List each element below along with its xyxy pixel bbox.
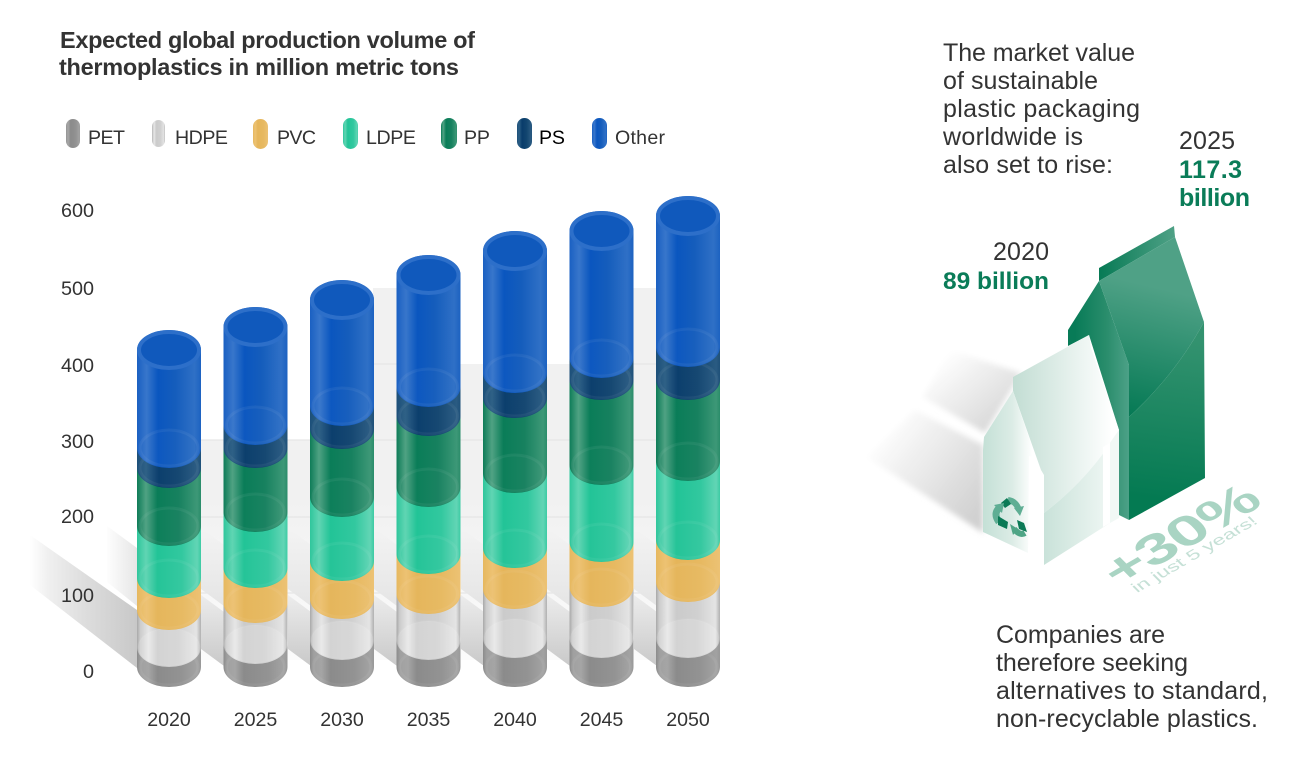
intro text: market value: worldwide is <box>942 123 1083 151</box>
HDPE segment <box>137 590 201 667</box>
HDPE segment <box>310 579 374 660</box>
carton shadows <box>867 350 1021 533</box>
value label: 2025: 117.3 <box>1179 156 1242 184</box>
y axis labels: 200 <box>61 506 94 528</box>
y axis labels: 600 <box>61 200 94 222</box>
PVC segment <box>396 534 460 614</box>
LDPE segment <box>137 506 201 598</box>
HDPE segment <box>224 583 288 664</box>
PP segment <box>396 396 460 507</box>
PS segment <box>656 327 720 400</box>
stacked cylinder: 2020 <box>137 330 201 687</box>
PP segment <box>224 428 288 532</box>
y axis labels: 100 <box>61 585 94 607</box>
x axis labels: 2020 <box>147 709 191 731</box>
closing text <box>996 621 1268 733</box>
legend item: PS: PS <box>539 127 565 149</box>
legend item: LDPE: LDPE <box>366 127 416 149</box>
legend item: HDPE: HDPE <box>175 127 228 149</box>
x axis labels: 2035 <box>407 709 450 731</box>
value label: 2025 <box>1179 127 1250 212</box>
closing text: non-recyclable plastics. <box>996 705 1258 733</box>
icon: recycling symbol <box>994 498 1027 535</box>
chart title <box>59 27 475 80</box>
y axis labels: 0 <box>83 661 94 683</box>
PS segment <box>310 386 374 449</box>
legend <box>66 118 665 149</box>
chart title: thermoplastics in million metric tons <box>59 54 459 80</box>
large green carton: 2025 <box>1068 226 1205 520</box>
legend item: PS <box>517 118 565 149</box>
PET segment <box>224 624 288 687</box>
value label: 2020: 89 billion <box>943 268 1049 295</box>
legend item: PVC <box>253 119 316 149</box>
LDPE segment <box>224 492 288 588</box>
PP segment <box>570 360 634 485</box>
PET segment <box>483 618 547 687</box>
PVC segment <box>483 528 547 609</box>
legend item: Other <box>592 118 665 149</box>
PP segment <box>483 378 547 493</box>
Other segment <box>310 280 374 426</box>
stacked cylinder: 2050 <box>656 196 720 687</box>
PVC segment <box>310 541 374 619</box>
PVC segment <box>137 558 201 630</box>
x axis labels: 2025 <box>234 709 277 731</box>
intro text: market value: also set to rise: <box>943 151 1113 179</box>
Other segment <box>396 255 460 407</box>
y axis labels: 300 <box>61 431 94 453</box>
PVC segment <box>570 522 634 607</box>
intro text: market value: The market value <box>943 39 1135 67</box>
x axis labels <box>147 709 710 731</box>
Other segment <box>224 307 288 445</box>
intro text: market value: plastic packaging <box>943 95 1140 123</box>
PET segment <box>570 618 634 687</box>
stacked cylinder: 2040 <box>483 231 547 687</box>
HDPE segment <box>483 569 547 658</box>
PET segment <box>137 627 201 687</box>
legend item: HDPE <box>152 120 228 149</box>
PS segment <box>224 405 288 468</box>
stacked cylinder: 2030 <box>310 280 374 687</box>
y axis labels <box>61 200 94 683</box>
HDPE segment <box>396 574 460 660</box>
PP segment <box>137 448 201 546</box>
HDPE segment <box>656 562 720 658</box>
closing text: Companies are <box>996 621 1165 649</box>
value label: 2020: 2020 <box>993 238 1049 266</box>
chart title: Expected global production volume of <box>60 27 475 53</box>
LDPE segment <box>570 445 634 562</box>
Other segment <box>656 196 720 367</box>
stacked cylinder: 2035 <box>396 255 460 687</box>
isometric text: +30%: +30% <box>1090 475 1271 595</box>
legend item: PET: PET <box>88 127 125 149</box>
legend item: PP: PP <box>464 127 490 149</box>
x axis labels: 2050 <box>666 709 710 731</box>
stacked cylinder: 2025 <box>224 307 288 687</box>
PP segment <box>656 360 720 481</box>
x axis labels: 2045 <box>580 709 623 731</box>
bar shadows on the floor <box>30 526 657 668</box>
LDPE segment <box>656 441 720 560</box>
PET segment <box>310 620 374 687</box>
Other segment <box>483 231 547 393</box>
x axis labels: 2040 <box>493 709 537 731</box>
closing text: alternatives to standard, <box>996 677 1268 705</box>
PS segment <box>137 428 201 488</box>
value label: 2020 <box>943 238 1049 295</box>
PVC segment <box>224 548 288 623</box>
LDPE segment <box>396 467 460 574</box>
legend item: Other: Other <box>615 127 665 149</box>
closing text: therefore seeking <box>996 649 1188 677</box>
Other segment <box>570 211 634 378</box>
LDPE segment <box>483 453 547 568</box>
stacked cylinder: 2045 <box>570 211 634 687</box>
legend item: PVC: PVC <box>277 127 316 149</box>
PET segment <box>396 620 460 687</box>
isometric text: in just 5 years!: in just 5 years! <box>1128 513 1262 596</box>
chart background: stepped grey planes <box>200 288 657 660</box>
intro text: market value <box>942 39 1140 179</box>
legend item: PET <box>66 119 125 149</box>
value label: 2025: billion <box>1179 184 1250 212</box>
PS segment <box>396 367 460 436</box>
LDPE segment <box>310 477 374 581</box>
x axis labels: 2030 <box>320 709 364 731</box>
PVC segment <box>656 520 720 602</box>
intro text: market value: of sustainable <box>943 67 1098 95</box>
PS segment <box>570 338 634 400</box>
legend item: PP <box>441 118 490 149</box>
value label: 2025: 2025 <box>1179 127 1235 155</box>
PP segment <box>310 409 374 517</box>
small light carton: 2020 <box>983 335 1119 565</box>
PS segment <box>483 353 547 418</box>
y axis labels: 500 <box>61 278 94 300</box>
PET segment <box>656 618 720 687</box>
Other segment <box>137 330 201 468</box>
y axis labels: 400 <box>61 355 94 377</box>
legend item: LDPE <box>343 118 416 149</box>
HDPE segment <box>570 567 634 658</box>
